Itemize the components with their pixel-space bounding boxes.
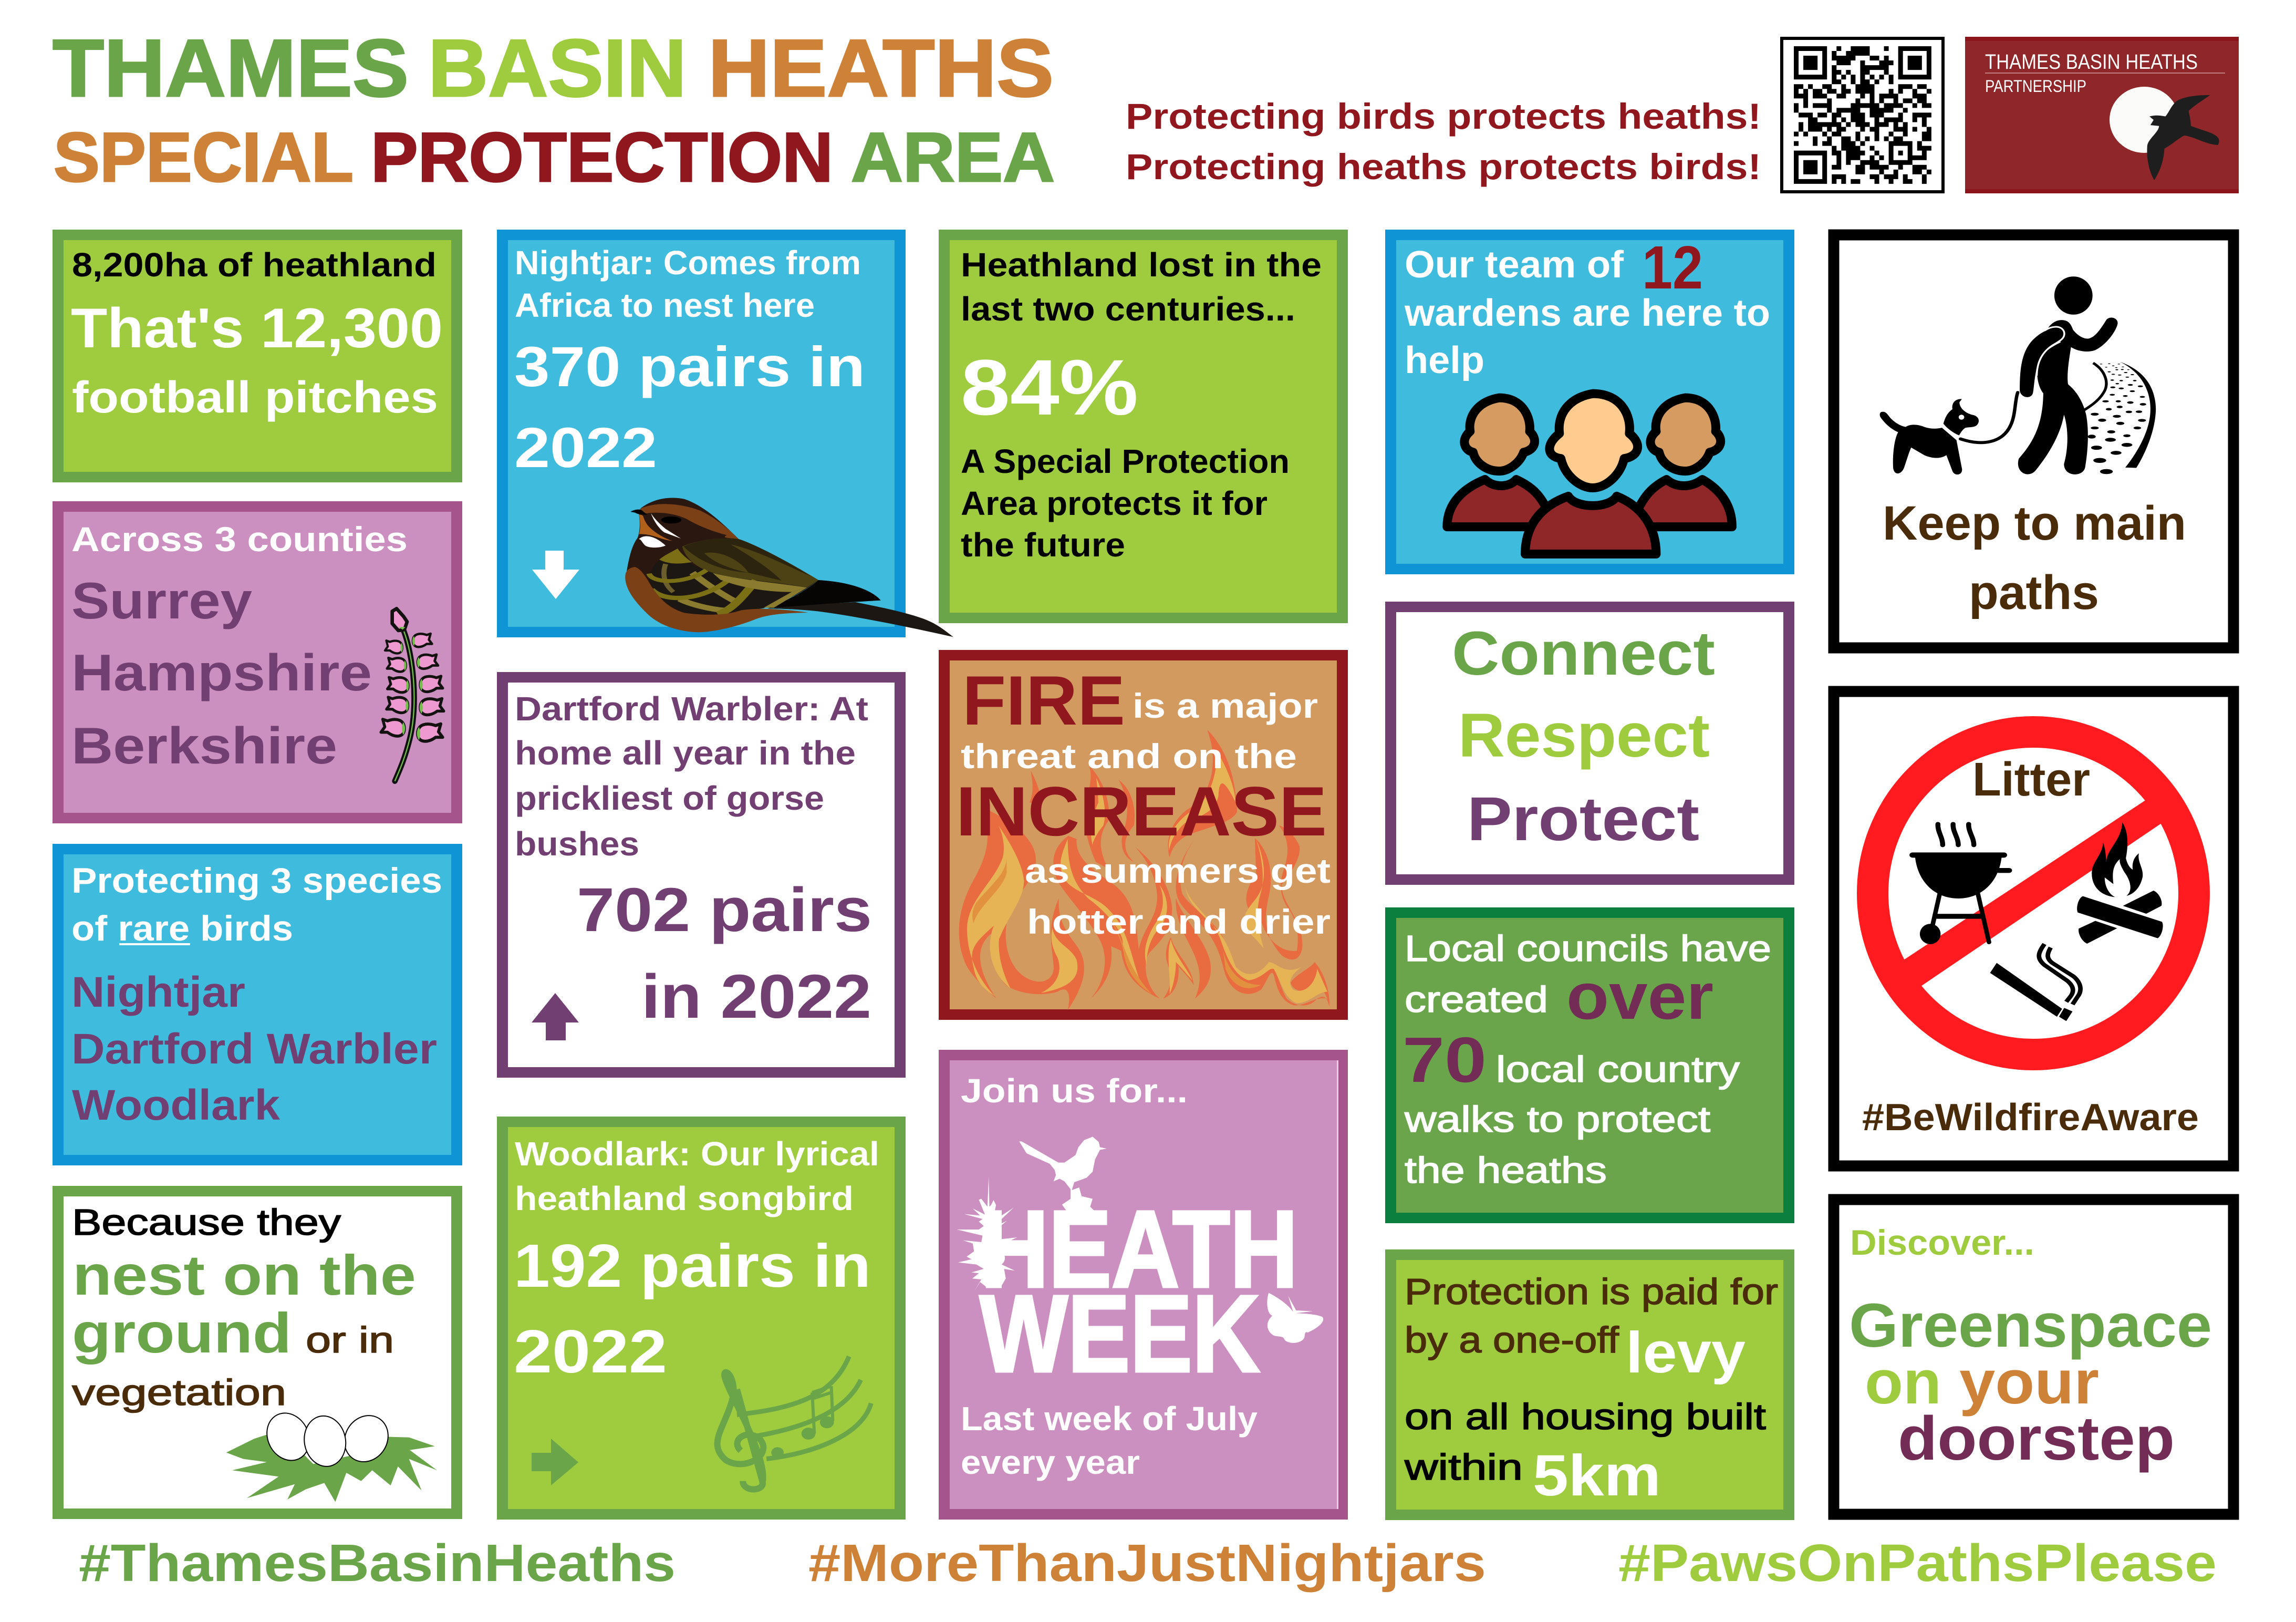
fire text: hotter and drier <box>1027 902 1331 941</box>
levy text: levy <box>1626 1320 1746 1385</box>
motto text: Respect <box>1458 701 1710 770</box>
fire text <box>956 662 1331 941</box>
panel: keep to main paths <box>1834 235 2233 648</box>
panel: wardens team <box>1385 230 1794 574</box>
counties text: Berkshire <box>71 717 337 774</box>
discover text: doorstep <box>1898 1404 2175 1473</box>
panel: heath week <box>939 1050 1348 1520</box>
icon: three wardens <box>1447 394 1732 554</box>
heath week text: Last week of July <box>961 1400 1258 1438</box>
litter text: #BeWildfireAware <box>1862 1097 2199 1139</box>
heathland text: 84% <box>961 343 1138 431</box>
partnership logo <box>1965 37 2239 193</box>
counties text: Across 3 counties <box>71 520 408 559</box>
paths text: Keep to main <box>1883 497 2186 550</box>
counties text: Surrey <box>71 572 252 629</box>
panel: connect respect protect <box>1385 602 1794 885</box>
panel text <box>71 246 443 422</box>
panel: dartford warbler <box>497 672 906 1078</box>
levy text: Protection is paid for <box>1405 1271 1778 1312</box>
warbler text: bushes <box>515 825 639 863</box>
nightjar text: 2022 <box>514 416 657 479</box>
hashtags <box>79 1534 2217 1593</box>
title <box>53 23 1055 197</box>
woodlark text: 192 pairs in <box>514 1232 871 1300</box>
hashtags: #MoreThanJustNightjars <box>808 1534 1486 1593</box>
councils text: the heaths <box>1405 1150 1607 1191</box>
species text: Woodlark <box>72 1081 280 1129</box>
levy text: by a one-off <box>1405 1319 1619 1360</box>
panel: heathland lost <box>939 230 1348 623</box>
levy text: on all housing built <box>1405 1396 1766 1437</box>
woodlark text: heathland songbird <box>515 1180 854 1217</box>
nest text: or in <box>306 1319 394 1360</box>
nightjar text: Nightjar: Comes from <box>515 244 861 282</box>
panel text: football pitches <box>72 373 438 422</box>
icon: prohibition sign <box>1873 732 2194 1055</box>
heathland text: last two centuries... <box>961 290 1295 328</box>
heath week text <box>961 1072 1298 1481</box>
panel: levy <box>1385 1249 1794 1520</box>
team text: wardens are here to <box>1404 292 1770 334</box>
heath week text: HEATH <box>981 1189 1298 1310</box>
paths text <box>1883 497 2186 619</box>
panel: 8,200ha of heathland <box>53 230 462 482</box>
paths text: paths <box>1969 566 2099 619</box>
team text: 12 <box>1642 233 1703 302</box>
arrow: down <box>532 551 579 599</box>
fire text: as summers get <box>1025 851 1331 890</box>
panel: woodlark <box>497 1117 906 1520</box>
arrow: up <box>532 993 579 1040</box>
tagline <box>1126 96 1761 187</box>
levy text: within <box>1404 1447 1523 1487</box>
partnership logo: THAMES BASIN HEATHS <box>1985 50 2198 74</box>
panel: nightjar <box>497 230 953 637</box>
fire text: FIRE <box>962 662 1125 740</box>
species text: Protecting 3 species <box>71 861 442 901</box>
councils text: over <box>1566 960 1713 1033</box>
heathland text <box>961 246 1322 564</box>
species text: of rare birds <box>71 908 293 948</box>
partnership logo: PARTNERSHIP <box>1985 77 2086 96</box>
heathland text: Heathland lost in the <box>961 246 1322 284</box>
hashtags: #ThamesBasinHeaths <box>79 1534 676 1593</box>
species text: Dartford Warbler <box>71 1025 437 1073</box>
woodlark text: Woodlark: Our lyrical <box>515 1135 879 1173</box>
QR code <box>1782 38 1943 192</box>
warbler text: 702 pairs <box>577 875 872 945</box>
nest text: ground <box>72 1301 292 1365</box>
councils text <box>1402 928 1771 1191</box>
team text <box>1404 233 1770 381</box>
nest text <box>72 1202 416 1413</box>
litter text: Litter <box>1972 753 2090 806</box>
nest text: nest on the <box>72 1243 416 1307</box>
icon: nightjar bird <box>625 498 953 637</box>
fire text: INCREASE <box>956 773 1327 851</box>
panel text: That's 12,300 <box>71 296 443 359</box>
species text: Nightjar <box>71 968 245 1016</box>
fire text: is a major <box>1133 686 1318 725</box>
nightjar text: 370 pairs in <box>514 335 865 398</box>
motto text: Connect <box>1452 619 1715 688</box>
counties text: Hampshire <box>71 644 372 701</box>
warbler text: in 2022 <box>641 962 871 1031</box>
icon: foxglove <box>381 608 444 781</box>
title: THAMES <box>53 23 409 113</box>
levy text: 5km <box>1533 1443 1661 1508</box>
discover text: on <box>1865 1348 1941 1417</box>
arrow: right <box>532 1439 578 1485</box>
counties text <box>71 520 408 774</box>
discover text <box>1849 1223 2212 1473</box>
icon: gorse, songbird and butterfly silhouettes <box>957 1137 1323 1343</box>
woodlark text: 2022 <box>514 1317 667 1386</box>
tagline: Protecting heaths protects birds! <box>1126 147 1761 187</box>
nightjar text: Africa to nest here <box>515 286 815 324</box>
heathland text: A Special Protection <box>961 442 1290 480</box>
title: SPECIAL <box>54 119 354 197</box>
heathland text: the future <box>961 526 1125 564</box>
heathland text: Area protects it for <box>961 484 1268 522</box>
panel: local councils <box>1385 907 1794 1223</box>
councils text: walks to protect <box>1404 1099 1710 1140</box>
litter text <box>1862 753 2199 1139</box>
team text: Our team of <box>1405 244 1624 286</box>
motto text: Protect <box>1467 784 1699 854</box>
panel: protecting 3 species <box>53 844 462 1165</box>
councils text: local country <box>1496 1049 1740 1090</box>
discover text: Discover... <box>1850 1223 2034 1263</box>
warbler text <box>515 690 872 1031</box>
nest text: Because they <box>72 1202 341 1243</box>
heath week text: WEEK <box>980 1273 1260 1395</box>
nest text: vegetation <box>72 1372 286 1413</box>
councils text: 70 <box>1402 1024 1487 1096</box>
nightjar text <box>514 244 865 479</box>
heath week text: every year <box>961 1443 1140 1481</box>
councils text: created <box>1405 979 1548 1020</box>
discover text: Greenspace <box>1849 1291 2212 1360</box>
title: BASIN <box>428 23 687 113</box>
councils text: Local councils have <box>1405 928 1771 969</box>
levy text <box>1404 1271 1778 1508</box>
title: HEATHS <box>708 23 1054 113</box>
panel: nest on the ground <box>53 1186 462 1519</box>
panel: fire <box>939 650 1348 1020</box>
woodlark text <box>514 1135 879 1386</box>
warbler text: home all year in the <box>515 734 856 772</box>
panel text: 8,200ha of heathland <box>72 246 437 284</box>
illustration: flames <box>959 730 1329 1010</box>
tagline: Protecting birds protects heaths! <box>1126 96 1761 137</box>
motto text <box>1452 619 1715 854</box>
icon: nest with eggs <box>226 1409 437 1502</box>
fire text: threat and on the <box>961 737 1297 776</box>
discover text: your <box>1959 1348 2099 1417</box>
team text: help <box>1405 339 1484 381</box>
panel: counties <box>53 501 462 823</box>
icon: music notes <box>718 1357 871 1490</box>
panel: wildfire aware <box>1834 691 2233 1166</box>
hashtags: #PawsOnPathsPlease <box>1618 1534 2217 1593</box>
warbler text: prickliest of gorse <box>515 779 824 817</box>
icon: person walking dog on path <box>1880 276 2156 474</box>
heath week text: Join us for... <box>961 1072 1188 1110</box>
panel: discover greenspace <box>1834 1200 2233 1514</box>
warbler text: Dartford Warbler: At <box>515 690 868 728</box>
species text <box>71 861 442 1129</box>
title: AREA <box>851 119 1055 197</box>
title: PROTECTION <box>371 119 833 197</box>
